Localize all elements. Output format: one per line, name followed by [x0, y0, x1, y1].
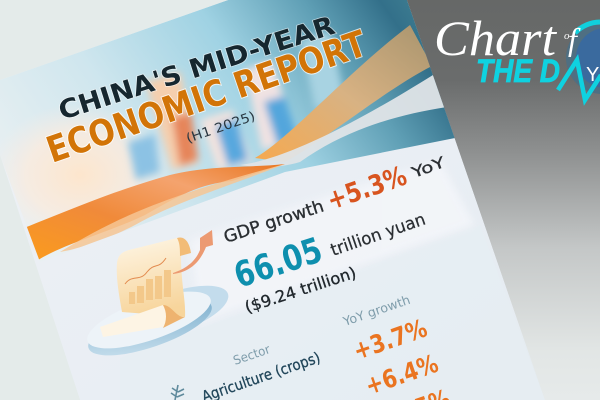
logo: Chart of the Day [434, 10, 600, 100]
GDP growth label: GDP growth [221, 197, 326, 248]
unit: trillion yuan [328, 210, 428, 261]
disc edge [82, 287, 218, 367]
logo: Chart of the Day: f [568, 21, 581, 57]
city-style bars [128, 30, 345, 180]
disc shadow [116, 275, 234, 349]
logo letter Y: Y [586, 64, 599, 86]
panel: header illustration [0, 0, 470, 270]
arrow [173, 230, 213, 274]
icon: wheat [171, 385, 184, 400]
logo: Chart of the Day: o [564, 30, 570, 42]
mini bar chart [129, 270, 171, 304]
table [171, 292, 454, 400]
GDP growth value: +5.3% [323, 161, 411, 217]
background: pale left area [0, 0, 407, 400]
mini line [125, 258, 166, 284]
title line 1: CHINA'S MID-YEAR [55, 11, 339, 127]
logo wordmark: THE D [476, 53, 560, 89]
value row 2: +6.4% [362, 349, 442, 400]
panel: table background [120, 225, 545, 400]
USD value: ($9.24 trillion) [242, 263, 359, 317]
GDP value: 66.05 [229, 231, 327, 297]
scroll [117, 238, 190, 317]
value row 1: +3.7% [350, 314, 431, 366]
table header: sector: Sector [231, 341, 273, 368]
header ribbons [255, 25, 432, 162]
YoY label: YoY [408, 153, 448, 182]
logo script: Chart [434, 10, 557, 66]
scroll fold [100, 305, 166, 337]
logo zigzag [558, 60, 600, 100]
subtitle: (H1 2025) [184, 109, 257, 147]
GDP headline figures [221, 153, 448, 317]
panel: GDP card highlight [197, 166, 468, 309]
logo ring [566, 22, 600, 94]
disc top [81, 280, 217, 360]
title line 2: ECONOMIC REPORT [42, 24, 372, 172]
icon: report on disc with rising arrow [81, 230, 234, 367]
title [42, 11, 372, 172]
table header: YoY growth: YoY growth [340, 292, 412, 329]
